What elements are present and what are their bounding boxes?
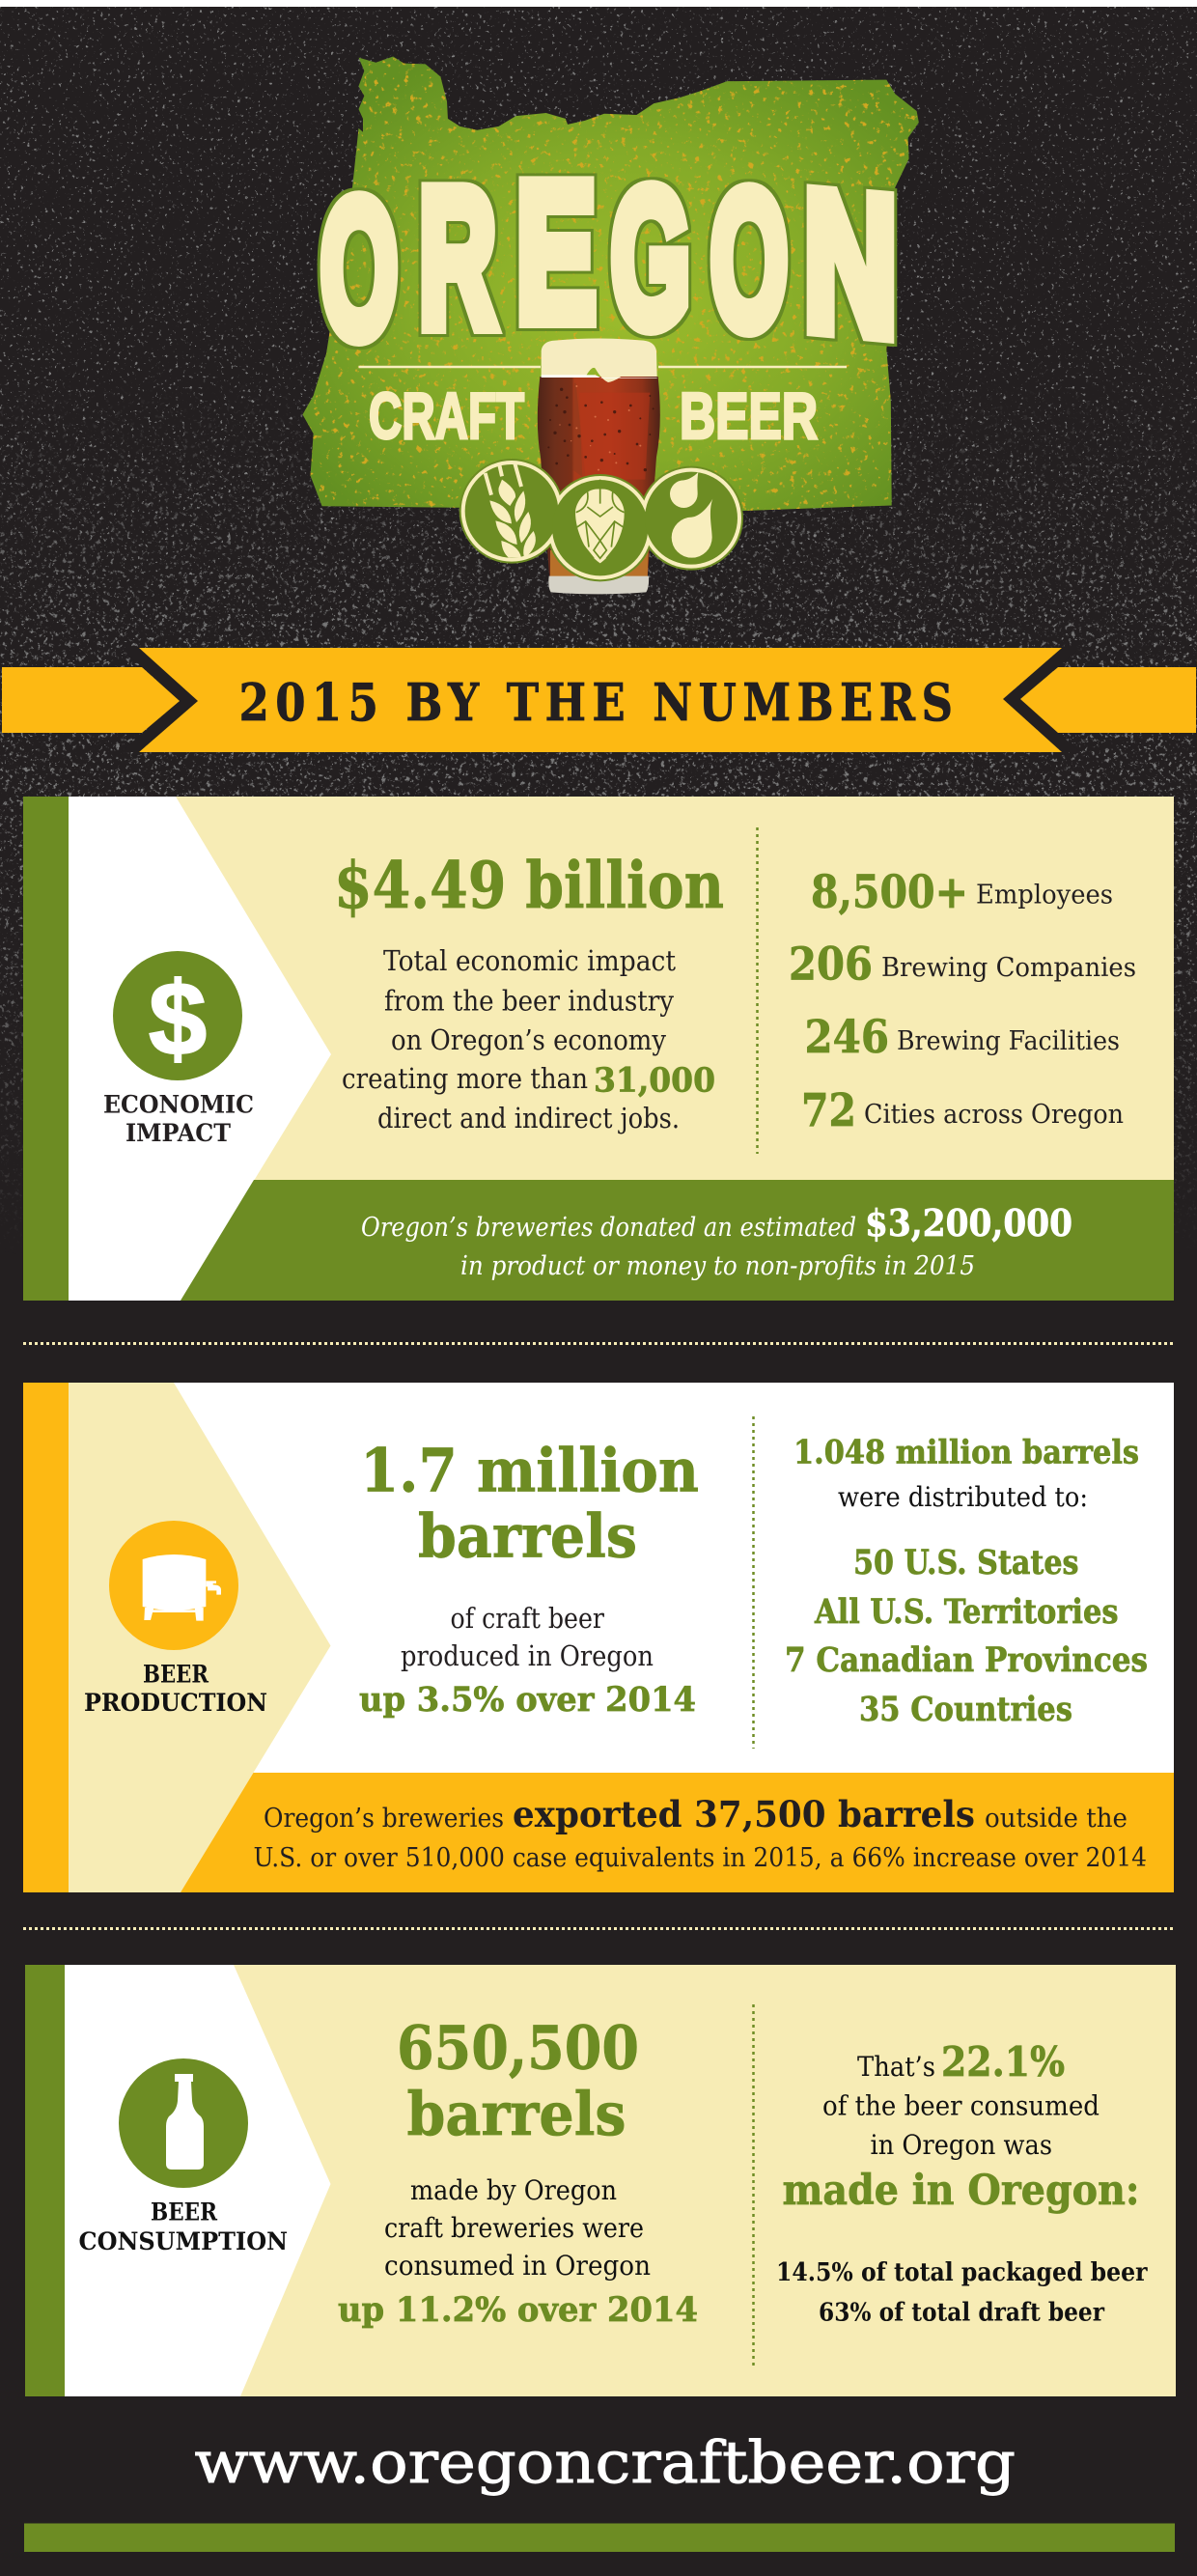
donation callout: $3,200,000 (865, 1201, 1072, 1245)
share of consumption: made in Oregon: (782, 2167, 1139, 2215)
description: made by Oregon (410, 2174, 617, 2206)
icon: dollar (113, 951, 242, 1080)
stats list: Brewing Companies (881, 953, 1136, 983)
headline stat: barrels (418, 1500, 637, 1572)
description: of craft beer (450, 1602, 604, 1635)
panel: beer consumption (25, 1965, 1176, 2396)
panel: beer production (23, 1383, 1174, 1892)
donation callout (361, 1201, 1072, 1281)
stats list (789, 866, 1136, 1137)
description (338, 2174, 698, 2330)
banner: 2015 by the numbers: 2015 BY THE NUMBERS (239, 672, 953, 733)
section label (103, 1091, 254, 1147)
section label: IMPACT (125, 1119, 231, 1147)
wordmark: OREGON: E (516, 142, 596, 361)
description: produced in Oregon (401, 1639, 654, 1672)
section label: BEER (151, 2198, 217, 2226)
wordmark: OREGON: O (320, 159, 398, 378)
wordmark: OREGON: O (710, 151, 788, 370)
section label (84, 1661, 267, 1717)
headline stat: $4.49 billion (334, 848, 724, 923)
description: craft breweries were (384, 2212, 644, 2244)
stats list: 206 (789, 938, 873, 991)
divider (756, 827, 759, 1154)
wordmark: OREGON (320, 142, 897, 378)
share of consumption: 14.5% of total packaged beer (776, 2258, 1148, 2287)
wordmark: OREGON: R (419, 148, 496, 367)
description: on Oregon’s economy (391, 1023, 667, 1056)
distribution list: 1.048 million barrels (793, 1433, 1139, 1471)
headline stat: 650,500 (397, 2012, 639, 2084)
distribution list: 50 U.S. States (853, 1543, 1079, 1582)
description: creating more than (342, 1062, 588, 1095)
section label (79, 2198, 288, 2255)
share of consumption (776, 2038, 1148, 2327)
rule lines (359, 366, 847, 368)
share of consumption: That’s (857, 2051, 935, 2083)
headline stat: barrels (407, 2079, 626, 2149)
donation callout: in product or money to non-profits in 2015 (460, 1251, 975, 1281)
export callout: U.S. or over 510,000 case equivalents in 2015, a 66% increase over 2014 (253, 1843, 1147, 1873)
stats list: 72 (801, 1084, 856, 1137)
distribution list (785, 1433, 1148, 1729)
logo: Oregon Craft Beer (290, 48, 946, 594)
website url: www.oregoncraftbeer.org (195, 2429, 1016, 2497)
description: direct and indirect jobs. (377, 1102, 680, 1134)
headline stat (360, 1435, 699, 1572)
icon: barrel (109, 1521, 238, 1650)
description: up 3.5% over 2014 (359, 1680, 696, 1720)
icon: bottle (119, 2058, 248, 2188)
divider (752, 1416, 755, 1749)
section label: BEER (143, 1661, 209, 1688)
description: from the beer industry (384, 985, 675, 1018)
icon: dollar: $ (149, 960, 207, 1077)
share of consumption: 63% of total draft beer (819, 2298, 1104, 2327)
distribution list: were distributed to: (838, 1481, 1088, 1513)
footer bar (24, 2524, 1175, 2552)
export callout: outside the (985, 1804, 1127, 1834)
distribution list: 7 Canadian Provinces (785, 1640, 1148, 1680)
wordmark: BEER: BEER (680, 379, 818, 453)
section label: ECONOMIC (103, 1091, 254, 1118)
wordmark: OREGON: N (804, 151, 897, 378)
stats list: Brewing Facilities (897, 1026, 1120, 1056)
donation callout: Oregon’s breweries donated an estimated (361, 1213, 856, 1243)
stats list: Cities across Oregon (864, 1100, 1124, 1130)
wordmark: CRAFT: CRAFT (369, 379, 524, 453)
banner: 2015 by the numbers (2, 648, 1196, 752)
oregon state shape (302, 56, 919, 511)
share of consumption: in Oregon was (871, 2129, 1052, 2161)
description (359, 1602, 696, 1720)
distribution list: 35 Countries (859, 1690, 1072, 1729)
panel: economic impact (23, 797, 1174, 1301)
stats list: 246 (805, 1011, 889, 1064)
headline stat: 1.7 million (360, 1435, 699, 1506)
divider (752, 2004, 755, 2367)
share of consumption: of the beer consumed (822, 2089, 1100, 2122)
wordmark: OREGON: G (611, 150, 690, 368)
headline stat (397, 2012, 639, 2149)
distribution list: All U.S. Territories (814, 1592, 1118, 1632)
export callout: Oregon’s breweries (264, 1804, 504, 1834)
stats list: Employees (976, 881, 1113, 910)
section label: CONSUMPTION (79, 2227, 288, 2255)
stats list: 8,500+ (811, 866, 968, 919)
description: consumed in Oregon (384, 2250, 651, 2282)
description: 31,000 (594, 1060, 715, 1101)
export callout: exported 37,500 barrels (513, 1793, 975, 1835)
description: Total economic impact (383, 944, 676, 977)
icon badges: barley, hop, water (459, 459, 743, 581)
description (342, 944, 715, 1134)
export callout (253, 1793, 1147, 1873)
share of consumption: 22.1% (941, 2038, 1065, 2086)
beer glass (538, 338, 660, 594)
section label: PRODUCTION (84, 1689, 267, 1717)
description: up 11.2% over 2014 (338, 2290, 698, 2330)
